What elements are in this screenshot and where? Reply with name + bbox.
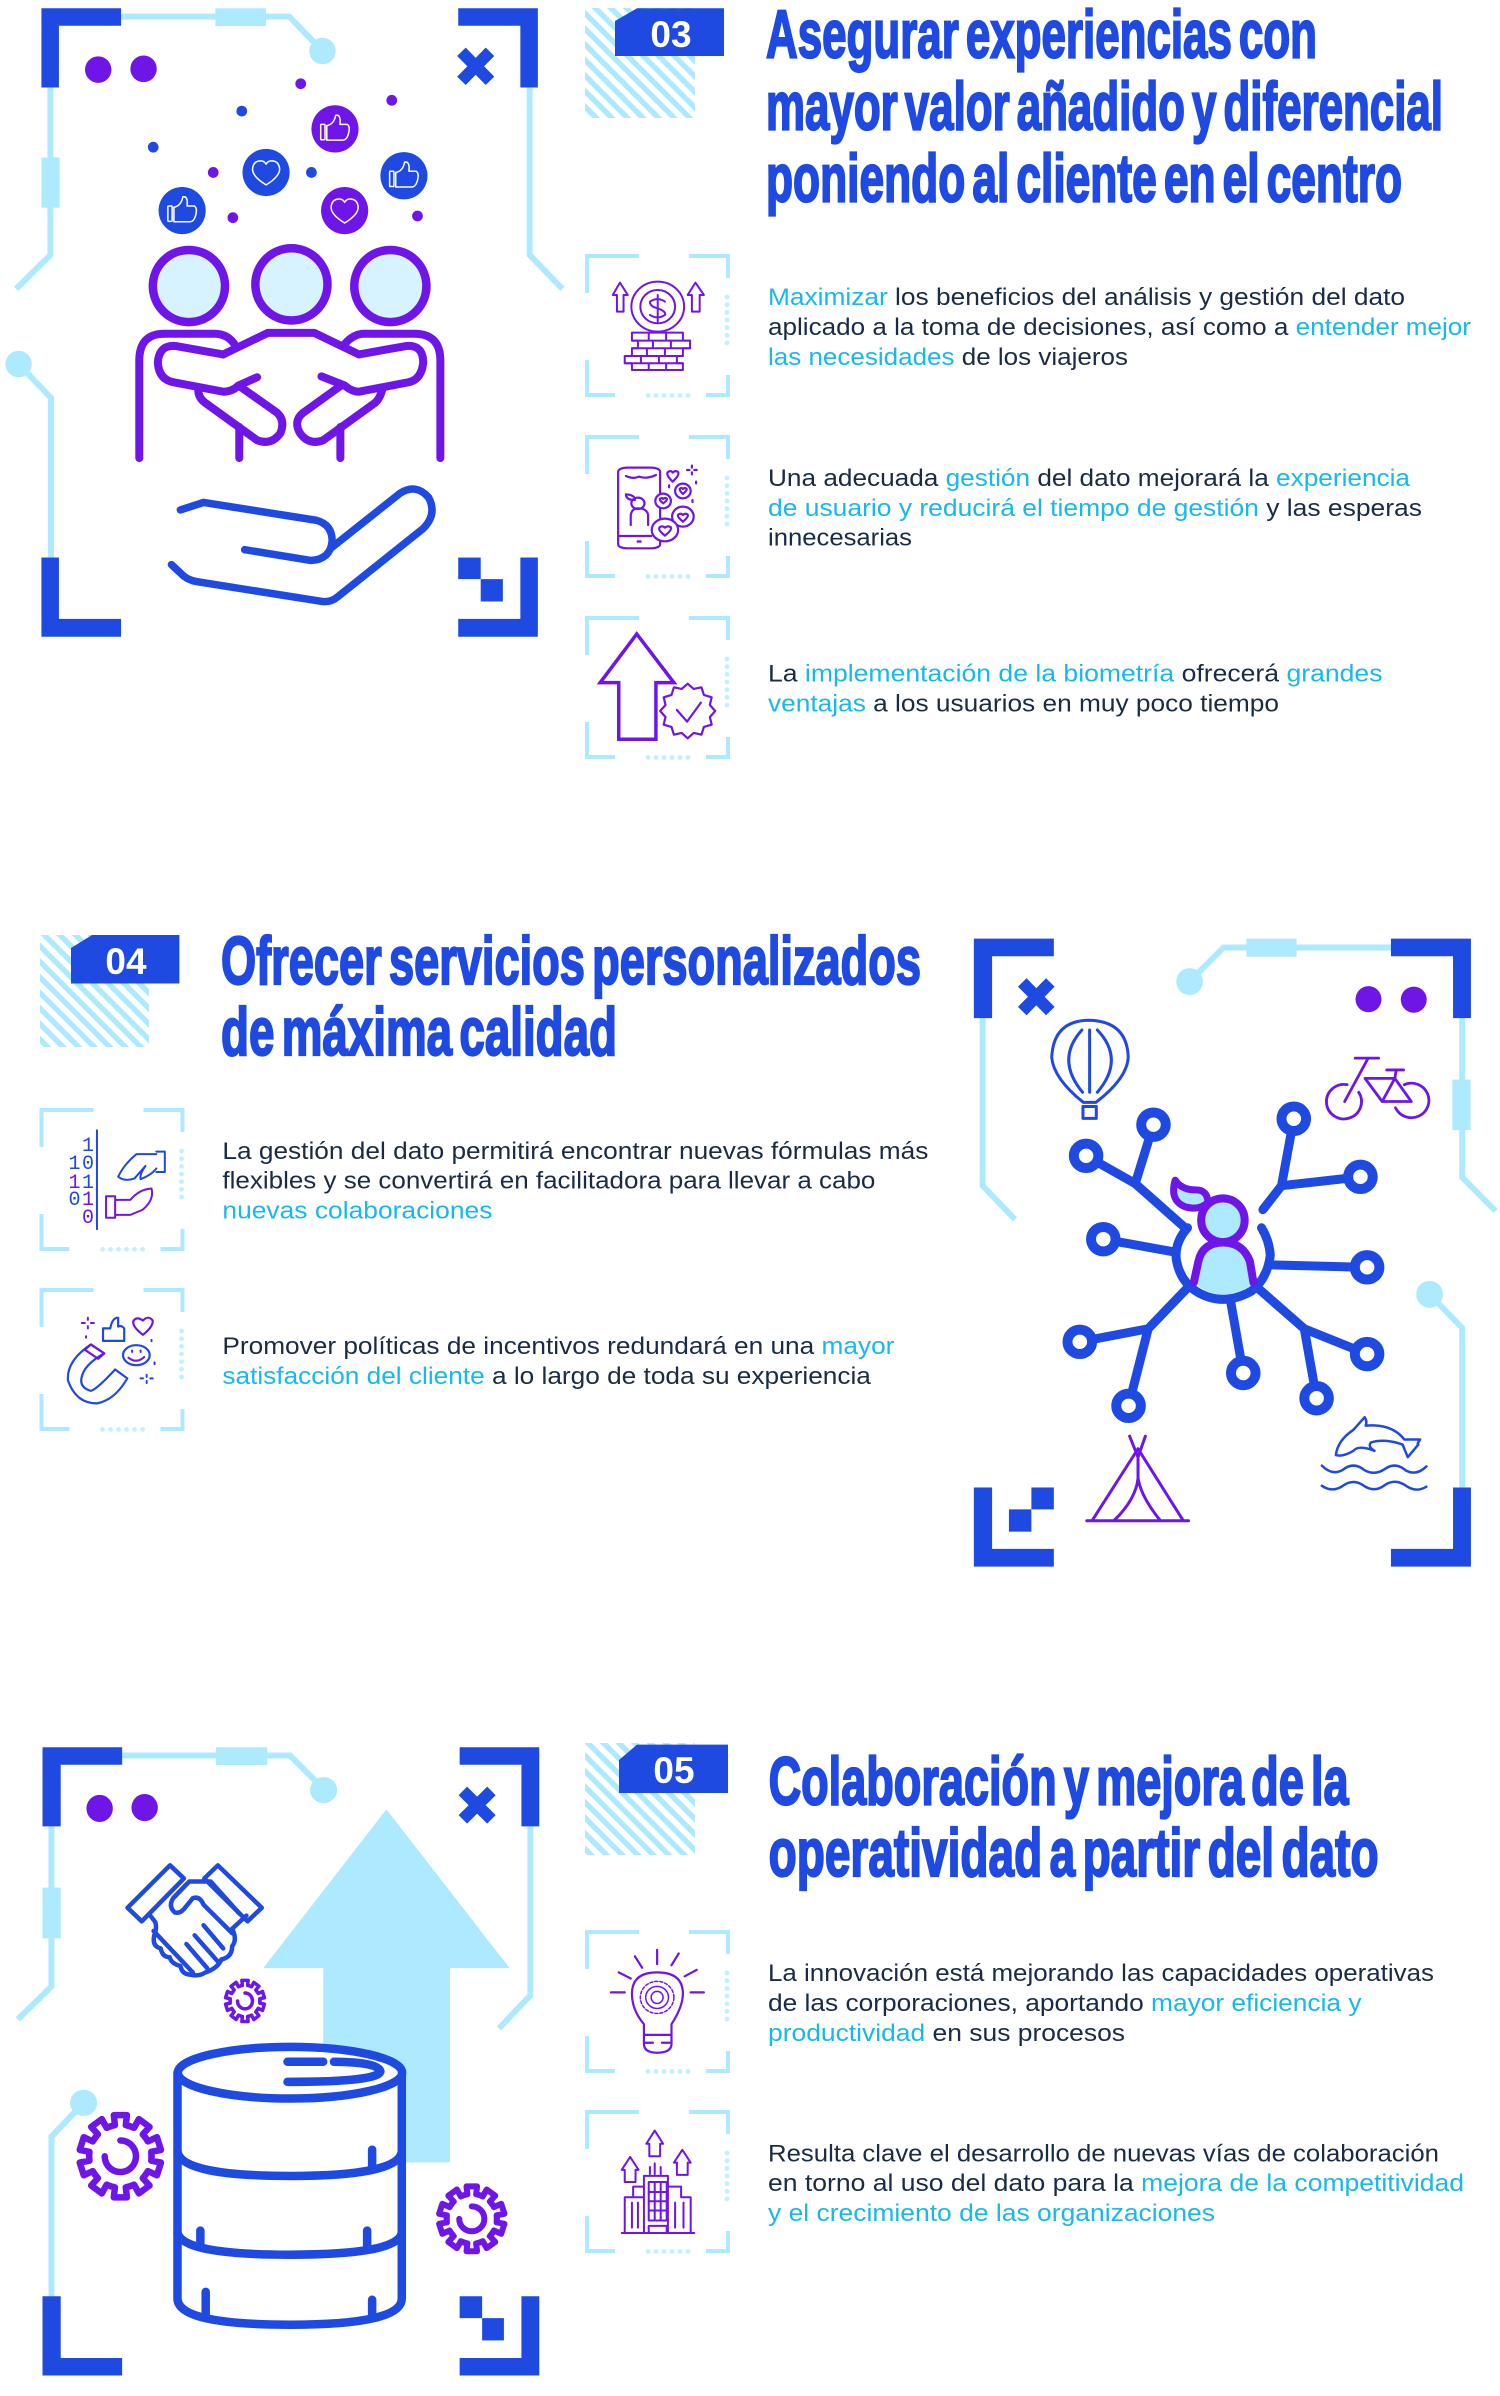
text: item 3.1: Maximizar los beneficios del análisis y gestión del dato [768, 284, 1405, 311]
central person with leaf [1174, 1180, 1253, 1294]
text: item 5.1: productividad en sus procesos [768, 2020, 1125, 2047]
icon: binary data and hands: 0 [68, 1189, 81, 1212]
text: item 4.2: Promover políticas de incentivos redundará en una mayor [222, 1333, 894, 1360]
illustration: database, rising arrow, handshake and gears [18, 1747, 539, 2375]
text: item 5.1: La innovación está mejorando las capacidades operativas [768, 1960, 1434, 1987]
open hand [171, 489, 432, 602]
section 05 [18, 1743, 1464, 2375]
icon: light bulb with gear [587, 1932, 729, 2074]
icon: hot-air balloon [1052, 1020, 1128, 1118]
hatch block behind number 05 [585, 1743, 695, 1855]
icon: binary data and hands: 0 [82, 1207, 94, 1230]
text: item 3.2: de usuario y reducirá el tiempo de gestión y las esperas [768, 495, 1422, 522]
section 03 [5, 0, 1471, 760]
icon: magnet attracting likes [42, 1290, 184, 1432]
illustration: customer at the centre of a service network [974, 939, 1495, 1567]
decorative circuit frame [5, 8, 562, 637]
icon: binary data and hands [42, 1110, 184, 1252]
icon: phone with hearts [587, 437, 729, 579]
large up arrow [263, 1809, 510, 2162]
illustration: community of customers held in a hand [5, 8, 562, 637]
number badge 03: 03 [650, 14, 692, 55]
number badge 04: 04 [105, 941, 147, 982]
icon: binary data and hands: 1 [68, 1153, 81, 1176]
icon: growing building with arrows [587, 2112, 729, 2254]
number badge 05: 05 [653, 1750, 695, 1791]
hatch block behind number 03 [585, 8, 695, 118]
text: item 4.2 [222, 1333, 894, 1390]
decorative circuit frame [18, 1747, 539, 2375]
decorative circuit frame [974, 939, 1495, 1567]
text: item 3.1 [768, 284, 1471, 371]
gear right [438, 2186, 505, 2251]
icon: bicycle [1326, 1058, 1429, 1119]
text: item 5.2 [768, 2141, 1464, 2227]
text: item 3.2 [768, 465, 1422, 552]
heading 04: Ofrecer servicios personalizados [221, 923, 921, 999]
text: item 4.1: La gestión del dato permitirá encontrar nuevas fórmulas más [222, 1138, 928, 1165]
number badge 04 [71, 935, 179, 984]
number badge 05 [619, 1745, 728, 1793]
large gear left [79, 2115, 162, 2197]
heading 03 [766, 0, 1443, 216]
text: item 4.1 [222, 1138, 928, 1224]
text: item 5.1: de las corporaciones, aportando mayor eficiencia y [768, 1990, 1362, 2017]
text: item 4.1: flexibles y se convertirá en facilitadora para llevar a cabo [222, 1168, 875, 1194]
icon: binary data and hands: 1 [82, 1172, 94, 1195]
icon: dolphin and waves [1322, 1417, 1426, 1490]
text: item 5.2: en torno al uso del dato para la mejora de la competitividad [768, 2170, 1464, 2197]
text: item 5.2: Resulta clave el desarrollo de nuevas vías de colaboración [768, 2141, 1439, 2168]
text: item 4.2: satisfacción del cliente a lo largo de toda su experiencia [222, 1363, 872, 1390]
text: item 3.3: ventajas a los usuarios en muy poco tiempo [768, 691, 1279, 718]
handshake icon [127, 1865, 262, 1975]
heading 04: de máxima calidad [221, 994, 617, 1070]
icon: coin on bricks [587, 256, 729, 398]
text: item 3.2: Una adecuada gestión del dato mejorará la experiencia [768, 465, 1411, 492]
icon: tent [1087, 1436, 1189, 1521]
small gear [225, 1980, 265, 2021]
heading 04 [221, 923, 921, 1070]
icon: binary data and hands: 1 [82, 1189, 94, 1212]
text: item 3.3 [768, 661, 1382, 718]
heading 05 [769, 1744, 1379, 1891]
text: item 3.1: aplicado a la toma de decisiones, así como a entender mejor [768, 314, 1471, 341]
text: item 4.1: nuevas colaboraciones [222, 1198, 492, 1224]
number badge 03 [615, 8, 724, 56]
text: item 3.1: las necesidades de los viajeros [768, 344, 1128, 371]
text: item 5.1 [768, 1960, 1434, 2047]
three people embracing [139, 248, 440, 458]
network of connected nodes [1068, 1107, 1379, 1418]
floating dots [148, 78, 423, 223]
section 04 [40, 923, 1495, 1567]
icon: binary data and hands: 1 [82, 1135, 94, 1158]
icon: binary data and hands: 1 [68, 1172, 81, 1195]
hatch block behind number 04 [40, 935, 149, 1047]
text: item 3.2: innecesarias [768, 525, 912, 552]
text: item 5.2: y el crecimiento de las organizaciones [768, 2200, 1215, 2227]
icon: binary data and hands: 0 [82, 1153, 94, 1176]
database cylinder [177, 2047, 402, 2325]
icon: up arrow and quality badge [587, 618, 729, 760]
reaction bubbles: likes and hearts [159, 105, 427, 234]
text: item 3.3: La implementación de la biometría ofrecerá grandes [768, 661, 1382, 688]
